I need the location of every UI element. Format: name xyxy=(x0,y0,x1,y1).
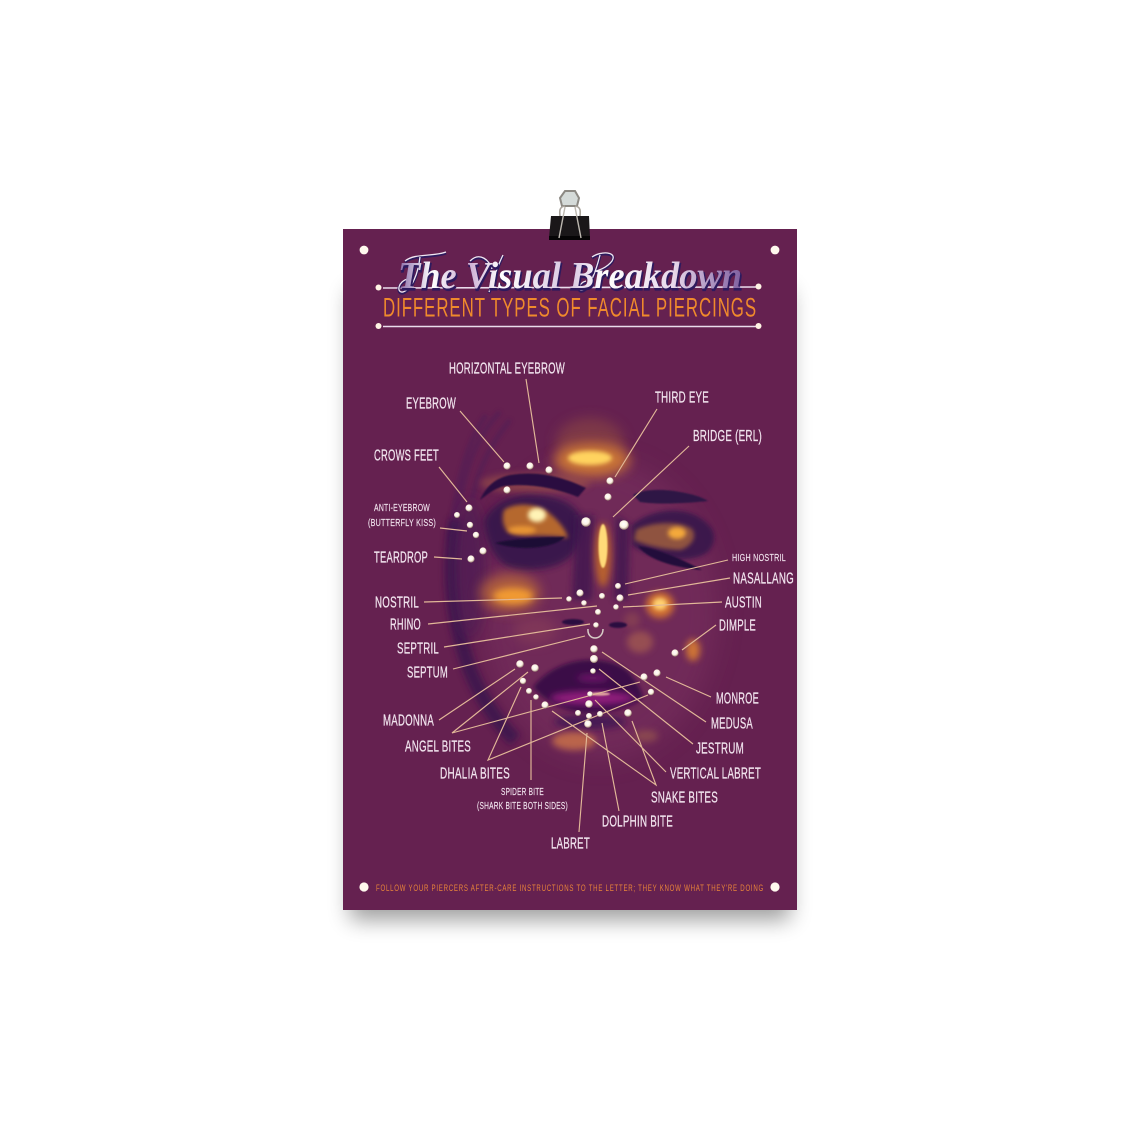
title: The Visual Breakdown xyxy=(398,255,742,297)
label: bridge: BRIDGE (ERL) xyxy=(693,428,762,445)
label: septril: SEPTRIL xyxy=(397,640,439,658)
label: anti-eyebrow: ANTI-EYEBROW xyxy=(374,502,430,514)
poster drop shadow xyxy=(350,290,790,920)
under lip shadow xyxy=(554,715,626,729)
label: vertical labret: VERTICAL LABRET xyxy=(670,766,761,782)
left eyelash xyxy=(495,537,565,548)
label: butterfly kiss: (BUTTERFLY KISS) xyxy=(368,517,436,529)
right eyebrow xyxy=(633,490,708,504)
label: high nostril: HIGH NOSTRIL xyxy=(732,552,786,564)
label: shark bite: (SHARK BITE BOTH SIDES) xyxy=(477,800,568,812)
corner studs xyxy=(359,246,780,892)
left eye lid xyxy=(503,505,568,538)
septum ring xyxy=(588,629,603,638)
binder clip xyxy=(549,191,590,240)
left cheek glow xyxy=(480,574,540,612)
label: septum: SEPTUM xyxy=(407,664,448,682)
label: spider bite: SPIDER BITE xyxy=(501,786,544,798)
label: angel bites: ANGEL BITES xyxy=(405,738,471,756)
title rules xyxy=(376,284,762,329)
label: medusa: MEDUSA xyxy=(711,716,753,732)
face base tone xyxy=(490,472,711,752)
right eyelash xyxy=(638,546,702,570)
label: teardrop: TEARDROP xyxy=(374,550,428,566)
face illustration xyxy=(450,412,718,760)
nostrils xyxy=(562,619,584,625)
label: dolphin bite: DOLPHIN BITE xyxy=(602,814,673,830)
hair strands xyxy=(452,413,509,518)
shadow around left eye xyxy=(484,495,583,570)
left side shadow xyxy=(452,520,515,740)
forehead glow xyxy=(554,416,625,451)
label: labret: LABRET xyxy=(551,836,590,852)
label: austin: AUSTIN xyxy=(725,594,762,612)
label: horizontal eyebrow: HORIZONTAL EYEBROW xyxy=(449,360,565,378)
footer note: FOLLOW YOUR PIERCERS AFTER-CARE INSTRUCTIONS TO THE LETTER; THEY KNOW WHAT THEY'RE DOING xyxy=(376,883,764,893)
label: eyebrow: EYEBROW xyxy=(406,396,456,412)
label: third eye: THIRD EYE xyxy=(655,390,709,406)
label: snake bites: SNAKE BITES xyxy=(651,790,718,806)
nose side shadows xyxy=(572,515,594,600)
label: rhino: RHINO xyxy=(390,616,421,634)
label: madonna: MADONNA xyxy=(383,712,434,730)
piercing studs xyxy=(454,462,679,728)
left eyebrow xyxy=(480,473,586,500)
label: dhalia bites: DHALIA BITES xyxy=(440,766,510,782)
right eye socket xyxy=(632,511,714,559)
lips xyxy=(533,660,643,713)
chin glow xyxy=(552,732,596,750)
right cheek glow xyxy=(646,592,674,618)
label: nasallang: NASALLANG xyxy=(733,570,794,588)
label: jestrum: JESTRUM xyxy=(696,740,744,758)
title: The Visual Breakdown xyxy=(399,257,743,299)
label: dimple: DIMPLE xyxy=(719,618,756,634)
nose highlight xyxy=(595,523,611,587)
label: crows feet: CROWS FEET xyxy=(374,448,439,464)
label: nostril: NOSTRIL xyxy=(375,594,419,612)
subtitle: DIFFERENT TYPES OF FACIAL PIERCINGS xyxy=(383,292,757,322)
label: monroe: MONROE xyxy=(716,690,759,708)
poster panel xyxy=(343,229,797,910)
leader lines xyxy=(424,379,730,832)
